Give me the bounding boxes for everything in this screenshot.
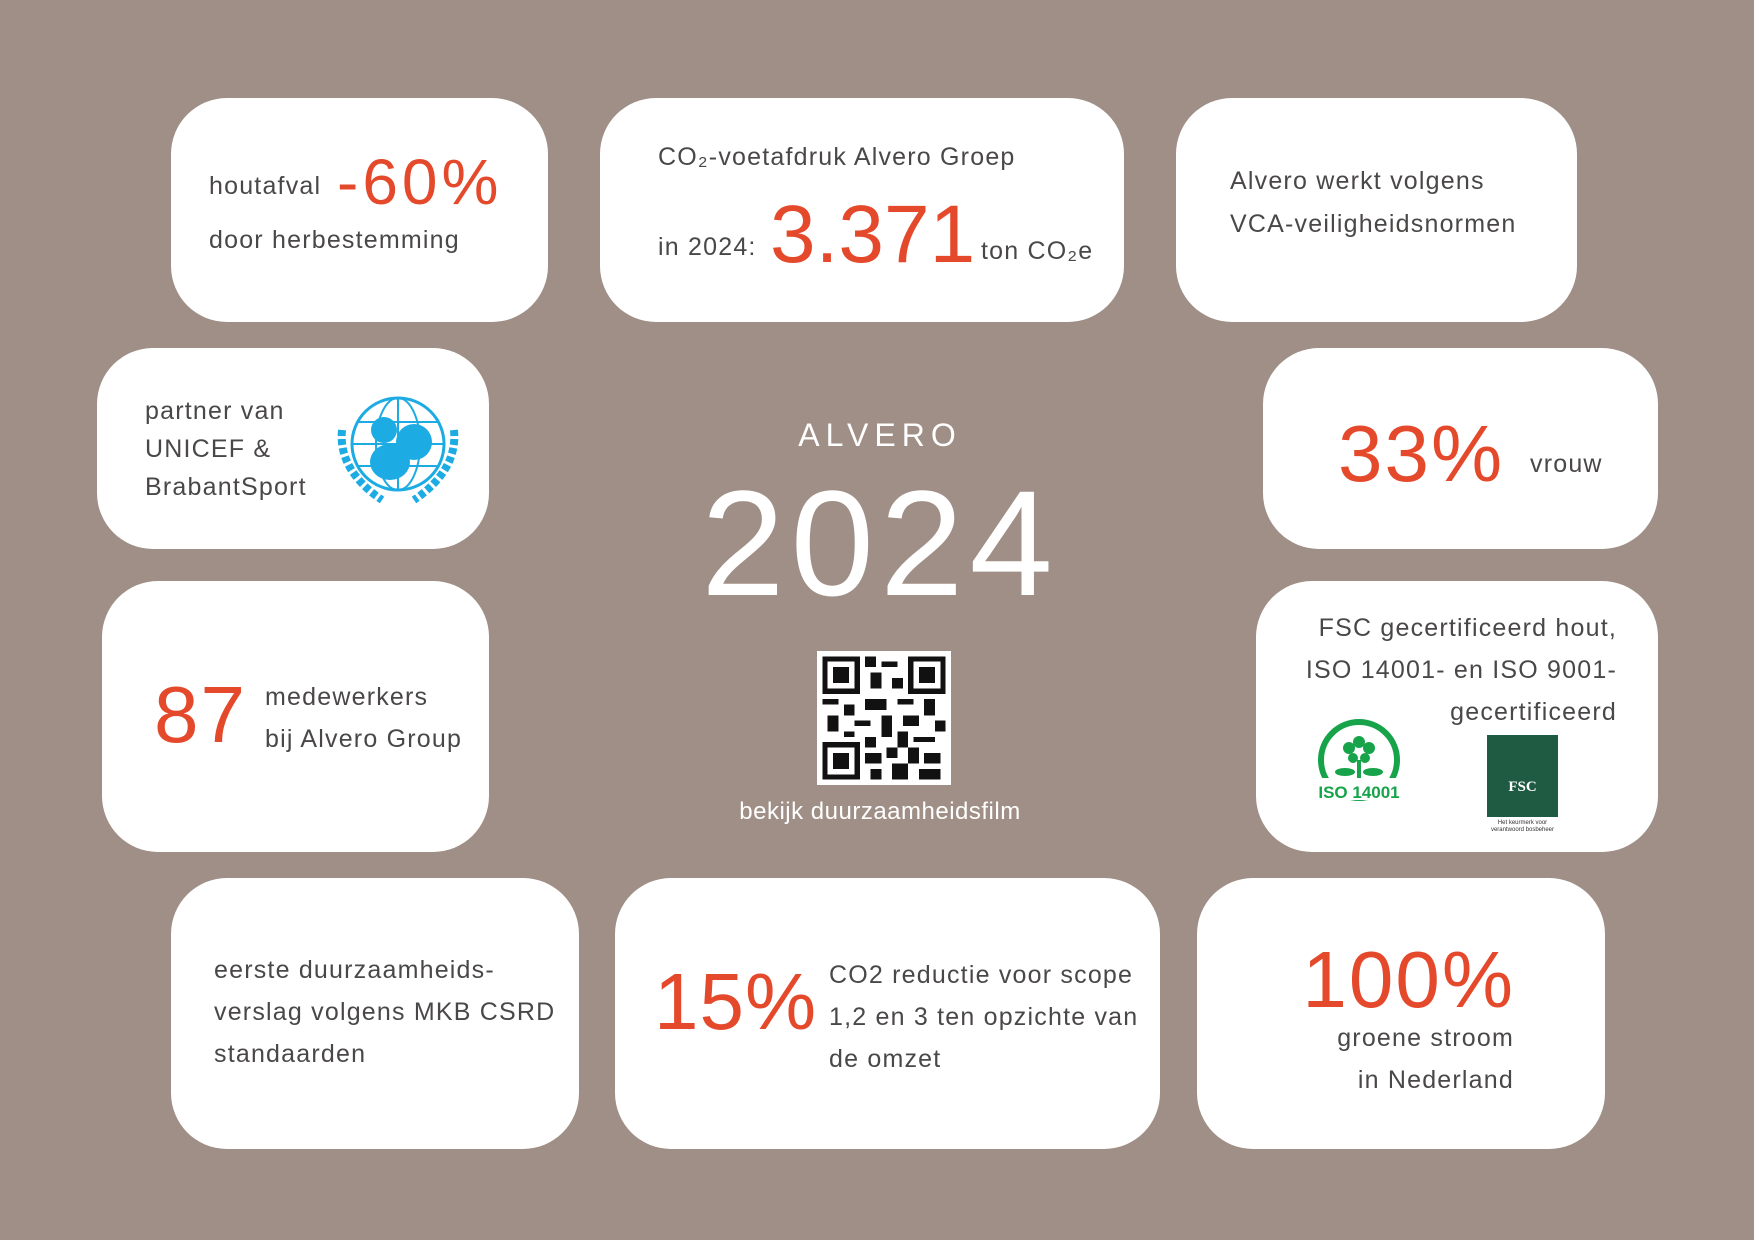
number: 100%: 100%: [1302, 935, 1515, 1024]
text: CSRD: [214, 956, 555, 1068]
card: 87 medewerkers: [102, 581, 489, 852]
text: reductie: 1,2 en 3 ten opzichte van: [829, 1003, 1138, 1031]
number: 15%: 15%: [654, 957, 817, 1046]
card: houtafval: [171, 98, 548, 322]
text: medewerkers: medewerkers: [265, 683, 428, 711]
text: FSC ISO: gecertificeerd: [1450, 698, 1617, 726]
text: groene stroom: groene stroom: [1337, 1024, 1514, 1052]
card: 33% vrouw: [1263, 348, 1658, 549]
text: partner: UNICEF &: [145, 435, 271, 463]
text: FSC ISO: FSC gecertificeerd hout,: [1319, 614, 1617, 642]
text: CSRD: verslag volgens MKB CSRD: [214, 998, 555, 1026]
QR code: [817, 651, 951, 785]
text: reductie: de omzet: [829, 1045, 941, 1073]
text: FSC ISO: [1306, 614, 1617, 726]
number: -60%: -60%: [337, 146, 502, 218]
text: VCA: Alvero werkt volgens: [1230, 167, 1485, 195]
card: 15% reductie: [615, 878, 1160, 1149]
card: groene stroom: [1197, 878, 1605, 1149]
text: VCA: VCA-veiligheidsnormen: [1230, 210, 1516, 238]
text: FSC ISO: ISO 14001- en ISO 9001-: [1306, 656, 1617, 684]
text: medewerkers: [265, 683, 462, 753]
icon: FSC logo: [1487, 735, 1558, 833]
text: partner: [145, 397, 307, 501]
card: VCA: [1176, 98, 1577, 322]
card: certification: verantwoord bosbeheer: [1491, 827, 1554, 833]
icon: FSC logo: FSC: [1508, 779, 1537, 795]
logo: ALVERO: ALVERO: [798, 417, 962, 453]
text: VCA: [1230, 167, 1516, 238]
text: CSRD: standaarden: [214, 1040, 366, 1068]
text: QR caption: bekijk duurzaamheidsfilm: [739, 798, 1021, 825]
text: vrouw: vrouw: [1530, 450, 1603, 478]
icon: ISO 14001 logo: ISO 14001: [1318, 783, 1400, 802]
card: UNICEF: [97, 348, 489, 549]
text: reductie: CO2 reductie voor scope: [829, 961, 1133, 989]
text: partner: partner van: [145, 397, 285, 425]
text: houtafval: houtafval: [209, 172, 321, 200]
text: groene stroom: in Nederland: [1358, 1066, 1514, 1094]
text: CO2 title: CO₂-voetafdruk Alvero Groep: [658, 143, 1016, 171]
text: groene stroom: [1337, 1024, 1514, 1094]
number: 3.371: 3.371: [770, 189, 975, 280]
number: 33%: 33%: [1338, 409, 1504, 498]
text: partner: BrabantSport: [145, 473, 307, 501]
text: medewerkers: bij Alvero Group: [265, 725, 462, 753]
card: CSRD: [171, 878, 579, 1149]
text: reductie: [829, 961, 1138, 1073]
icon: FSC logo: Het keurmerk voor: [1498, 820, 1547, 826]
icon: ISO 14001 logo: [1318, 719, 1400, 802]
icon: UNICEF logo: [338, 396, 458, 504]
text: door herbestemming: door herbestemming: [209, 226, 460, 254]
card: certification: [1256, 581, 1658, 852]
number: 87: 87: [154, 670, 247, 759]
card: CO2 footprint: [600, 98, 1124, 322]
text: ton CO2e: ton CO₂e: [981, 237, 1093, 265]
text: CSRD: eerste duurzaamheids-: [214, 956, 495, 984]
heading: 2024: 2024: [701, 459, 1059, 627]
text: in 2024: in 2024:: [658, 233, 757, 261]
